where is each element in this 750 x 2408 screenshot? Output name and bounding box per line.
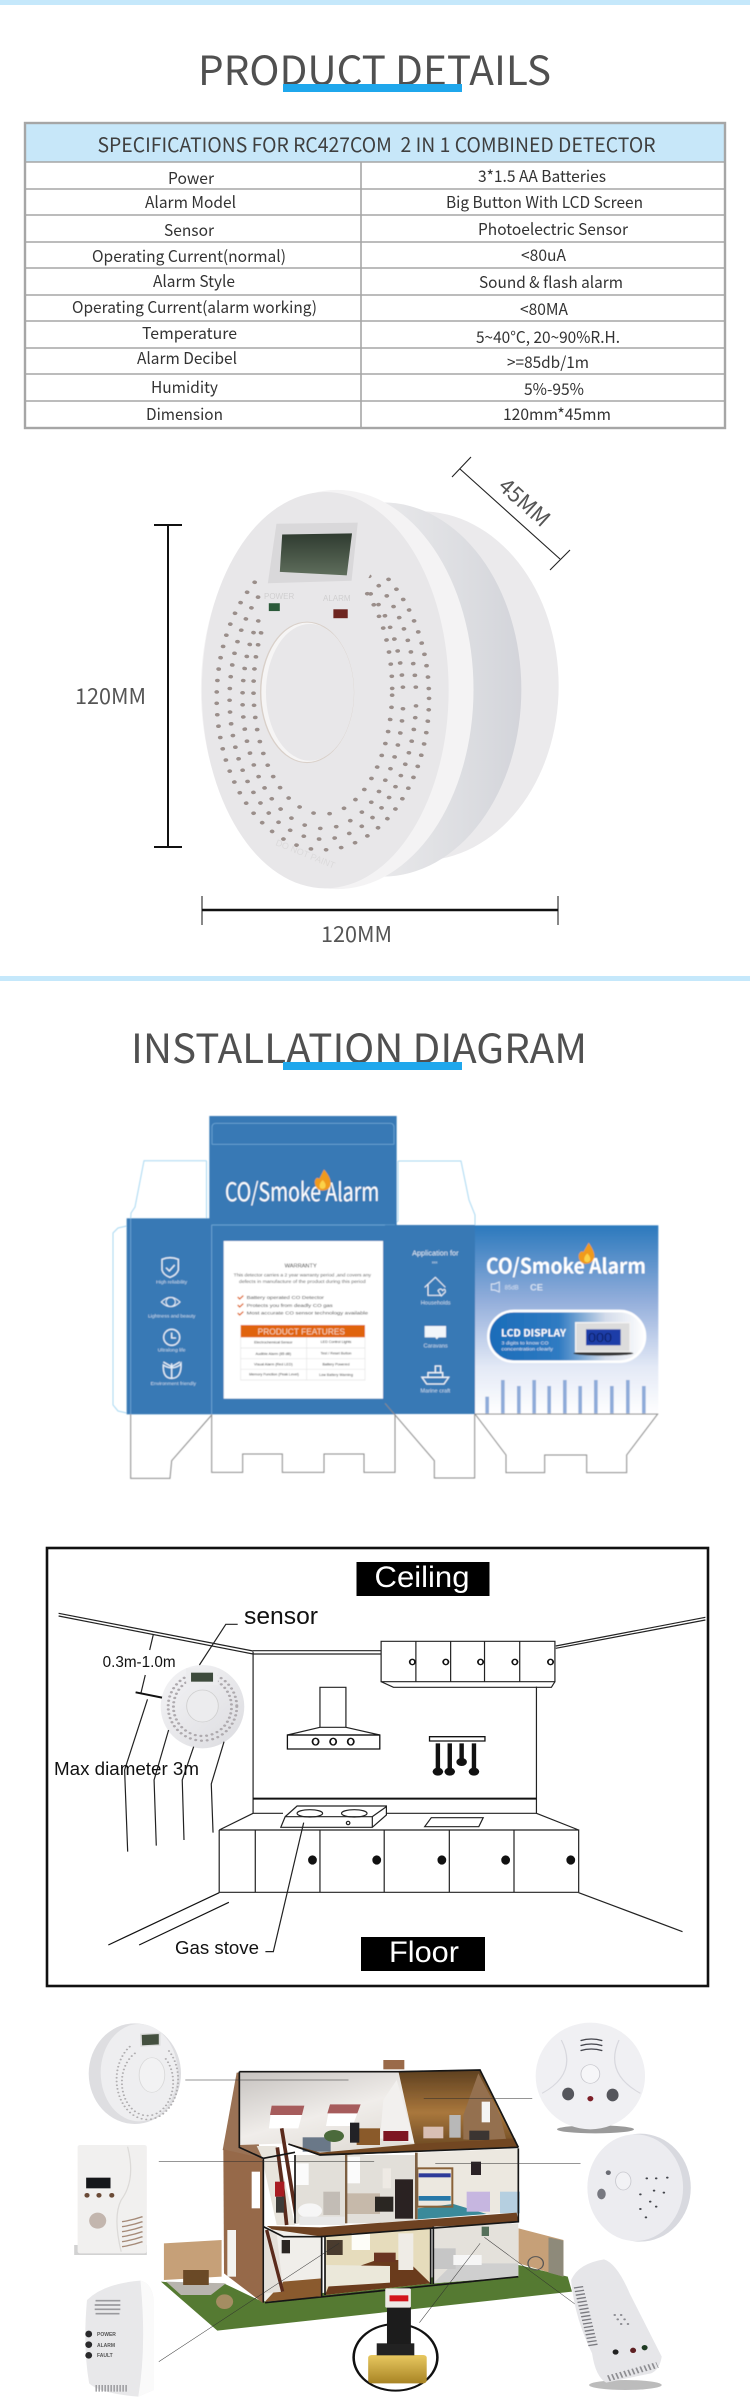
LCD screen — [268, 523, 358, 583]
box top and center panel — [209, 1116, 397, 1414]
detector printed labels: ALARM — [323, 594, 351, 603]
table left column labels: Temperature — [142, 320, 237, 344]
table right column values: Photoelectric Sensor — [478, 216, 629, 240]
left panel captions — [148, 1279, 197, 1387]
label: ceiling — [356, 1561, 490, 1596]
table left column labels: Operating Current(alarm working) — [72, 294, 317, 318]
product features table: Battery Powered — [322, 1363, 350, 1367]
icon: house — [425, 1277, 445, 1296]
range hood — [287, 1687, 380, 1749]
leader lines — [159, 2080, 581, 2362]
icon: flame — [579, 1243, 594, 1264]
sensor detector illustration — [161, 1665, 244, 1748]
attic storage — [398, 2070, 518, 2147]
icon: shield — [162, 1258, 178, 1277]
label: floor — [361, 1936, 485, 1971]
table header — [25, 123, 725, 162]
table left column labels: Power — [168, 165, 215, 189]
kitchen installation diagram frame — [47, 1548, 708, 1986]
table right column values: Sound & flash alarm — [479, 269, 623, 293]
wall gas alarm labels: ALARM — [97, 2343, 115, 2349]
detector printed labels — [264, 592, 351, 871]
icon: flame — [315, 1169, 331, 1191]
dimension: depth 45MM: 45MM — [492, 469, 558, 533]
table left column labels: Alarm Model — [145, 189, 236, 213]
warranty check list — [238, 1295, 368, 1317]
product features table: Test / Reset Button — [321, 1351, 351, 1355]
hanging utensils — [430, 1737, 485, 1776]
packaging box dieline — [113, 1116, 658, 1478]
left panel captions: Lightness and beauty — [148, 1313, 196, 1319]
table right column values: <80MA — [520, 296, 568, 320]
product features table: Memory Function (Peak Level) — [249, 1373, 299, 1377]
LED indicators — [269, 603, 348, 618]
box front panel: CO/Smoke Alarm — [486, 1249, 646, 1279]
LCD display pill: LCD DISPLAY — [501, 1325, 566, 1340]
product features table — [241, 1325, 365, 1380]
kitchen sink — [425, 1818, 483, 1827]
table right column values — [446, 163, 643, 425]
warranty card: WARRANTY — [285, 1263, 317, 1269]
sound holes — [217, 547, 429, 850]
top accent bar — [0, 0, 750, 5]
left panel captions: Environment friendly — [151, 1381, 197, 1387]
left panel captions: Ultralong life — [158, 1347, 186, 1353]
label: max diameter: Max diameter 3m — [54, 1759, 199, 1779]
house cutaway — [223, 2060, 520, 2303]
stairs — [257, 2128, 297, 2225]
dimension: depth 45MM — [452, 457, 570, 570]
dimension: width 120MM — [202, 896, 558, 949]
table left column labels: Dimension — [146, 401, 223, 425]
table left column labels — [72, 165, 317, 425]
detector: plug-in gas alarm with LCD — [74, 2145, 147, 2255]
decorative bar graph — [485, 1380, 646, 1413]
LCD display pill: 000 — [588, 1331, 612, 1345]
detector printed labels: DO NOT PAINT — [274, 838, 337, 871]
label: gas stove: Gas stove — [175, 1938, 259, 1958]
hall and stairs — [265, 2228, 322, 2302]
middle floor slab — [267, 2213, 518, 2237]
attic floor — [288, 2138, 518, 2156]
title: installation diagram: INSTALLATION DIAGRAM — [131, 1017, 587, 1075]
box application panel: Application for — [412, 1248, 459, 1257]
table left column labels: Operating Current(normal) — [92, 243, 286, 267]
LCD display pill: 3 digits to know CO — [501, 1340, 549, 1345]
kitchen line drawing — [59, 1613, 705, 1952]
certification marks — [491, 1282, 543, 1293]
box flap outlines — [113, 1161, 475, 1413]
chimney — [383, 2060, 404, 2069]
label: ceiling: Ceiling — [374, 1561, 470, 1594]
box application panel: xxx — [432, 1260, 438, 1264]
wall gas alarm labels: FAULT — [97, 2353, 113, 2359]
detector: tilted gas alarm — [571, 2259, 662, 2390]
icon: caravan — [425, 1326, 446, 1339]
warranty check list: Most accurate CO sensor technology available — [247, 1311, 368, 1317]
icon: clock — [164, 1329, 180, 1345]
certification marks: 85dB — [505, 1285, 519, 1291]
wall cabinet — [381, 1641, 555, 1687]
detector: round with LCD — [89, 2023, 181, 2124]
wall gas alarm labels: POWER — [97, 2332, 116, 2338]
table header: SPECIFICATIONS FOR RC427COM 2 IN 1 COMBINED DETECTOR — [98, 129, 656, 158]
cabinet handles — [308, 1855, 575, 1865]
box logo text: CO/Smoke Alarm — [225, 1173, 379, 1209]
LCD display pill — [488, 1311, 645, 1362]
wall gas alarm labels — [97, 2332, 116, 2359]
gas shutoff solenoid valve — [354, 2288, 437, 2391]
certification marks: CE — [530, 1283, 543, 1293]
house scene — [159, 2060, 581, 2362]
table left column labels: Humidity — [151, 374, 219, 398]
table left column labels: Alarm Decibel — [137, 345, 237, 369]
product photo: round detector — [201, 490, 559, 889]
box front panel — [475, 1225, 658, 1414]
brick side wall — [223, 2073, 263, 2303]
box application panel — [385, 1225, 475, 1414]
detector: wall gas alarm — [85, 2281, 154, 2397]
product features table: Visual Alarm (Red LED) — [254, 1363, 293, 1367]
product features table: Electrochemical Sensor — [254, 1341, 293, 1345]
structural frame — [239, 2070, 518, 2303]
walls and counter — [219, 1652, 683, 1932]
gas stove — [281, 1806, 386, 1827]
attic room — [239, 2071, 415, 2153]
label: mounting distance: 0.3m-1.0m — [103, 1654, 176, 1671]
product features table: PRODUCT FEATURES — [258, 1327, 345, 1337]
icon: boat — [422, 1366, 449, 1384]
ceiling lines — [59, 1613, 705, 1654]
specifications table — [25, 123, 725, 428]
living room — [325, 2228, 431, 2295]
product features table: Audible Alarm (85 dB) — [256, 1352, 291, 1356]
icon: leaf — [163, 1362, 181, 1378]
LCD display pill: concentration clearly — [501, 1347, 554, 1352]
title: product details: PRODUCT DETAILS — [198, 39, 551, 97]
product features table: Low Battery Warning — [319, 1373, 353, 1377]
box left panel — [127, 1218, 212, 1414]
table left column labels: Sensor — [164, 217, 215, 241]
table right column values: >=85db/1m — [507, 349, 589, 373]
detector: white smoke alarm — [536, 2023, 645, 2133]
bathroom and bedroom — [295, 2155, 415, 2225]
table left column labels: Alarm Style — [153, 268, 235, 292]
warranty check list: Protects you from deadly CO gas — [247, 1303, 333, 1309]
section divider bar — [0, 976, 750, 981]
box application panel: Marine craft — [420, 1389, 451, 1395]
detector printed labels: POWER — [264, 592, 294, 601]
table right column values: 5~40°C, 20~90%R.H. — [476, 324, 620, 348]
warranty check list: Battery operated CO Detector — [247, 1295, 324, 1301]
table right column values: 3*1.5 AA Batteries — [478, 163, 606, 187]
table right column values: <80uA — [521, 242, 566, 266]
label: floor: Floor — [389, 1936, 459, 1969]
kids bedroom — [415, 2149, 520, 2219]
dimension: height 120MM: 120MM — [75, 679, 146, 711]
icon: eye — [161, 1297, 180, 1307]
dimension: height 120MM — [75, 525, 182, 847]
table right column values: 120mm*45mm — [503, 401, 611, 425]
table right column values: 5%-95% — [524, 376, 584, 400]
box application panel: Households — [421, 1300, 451, 1306]
product features table: LED Control Lights — [321, 1340, 352, 1344]
box application panel: Caravans — [424, 1343, 448, 1349]
label: sensor: sensor — [244, 1603, 318, 1630]
warranty card: defects in manufacture of the product during this period — [239, 1279, 366, 1284]
left panel captions: High reliability — [156, 1279, 188, 1285]
kitchen room — [433, 2223, 518, 2283]
table right column values: Big Button With LCD Screen — [446, 189, 643, 213]
warranty card — [224, 1241, 383, 1399]
detector: round white sensor — [587, 2134, 691, 2242]
dimension: width 120MM: 120MM — [321, 917, 392, 949]
warranty card: This detector carries a 2 year warranty period ,and covers any — [234, 1273, 372, 1278]
box bottom tabs — [131, 1403, 658, 1478]
lawn and fences — [161, 2228, 572, 2331]
leader lines — [125, 1624, 304, 1952]
center button — [261, 622, 354, 763]
